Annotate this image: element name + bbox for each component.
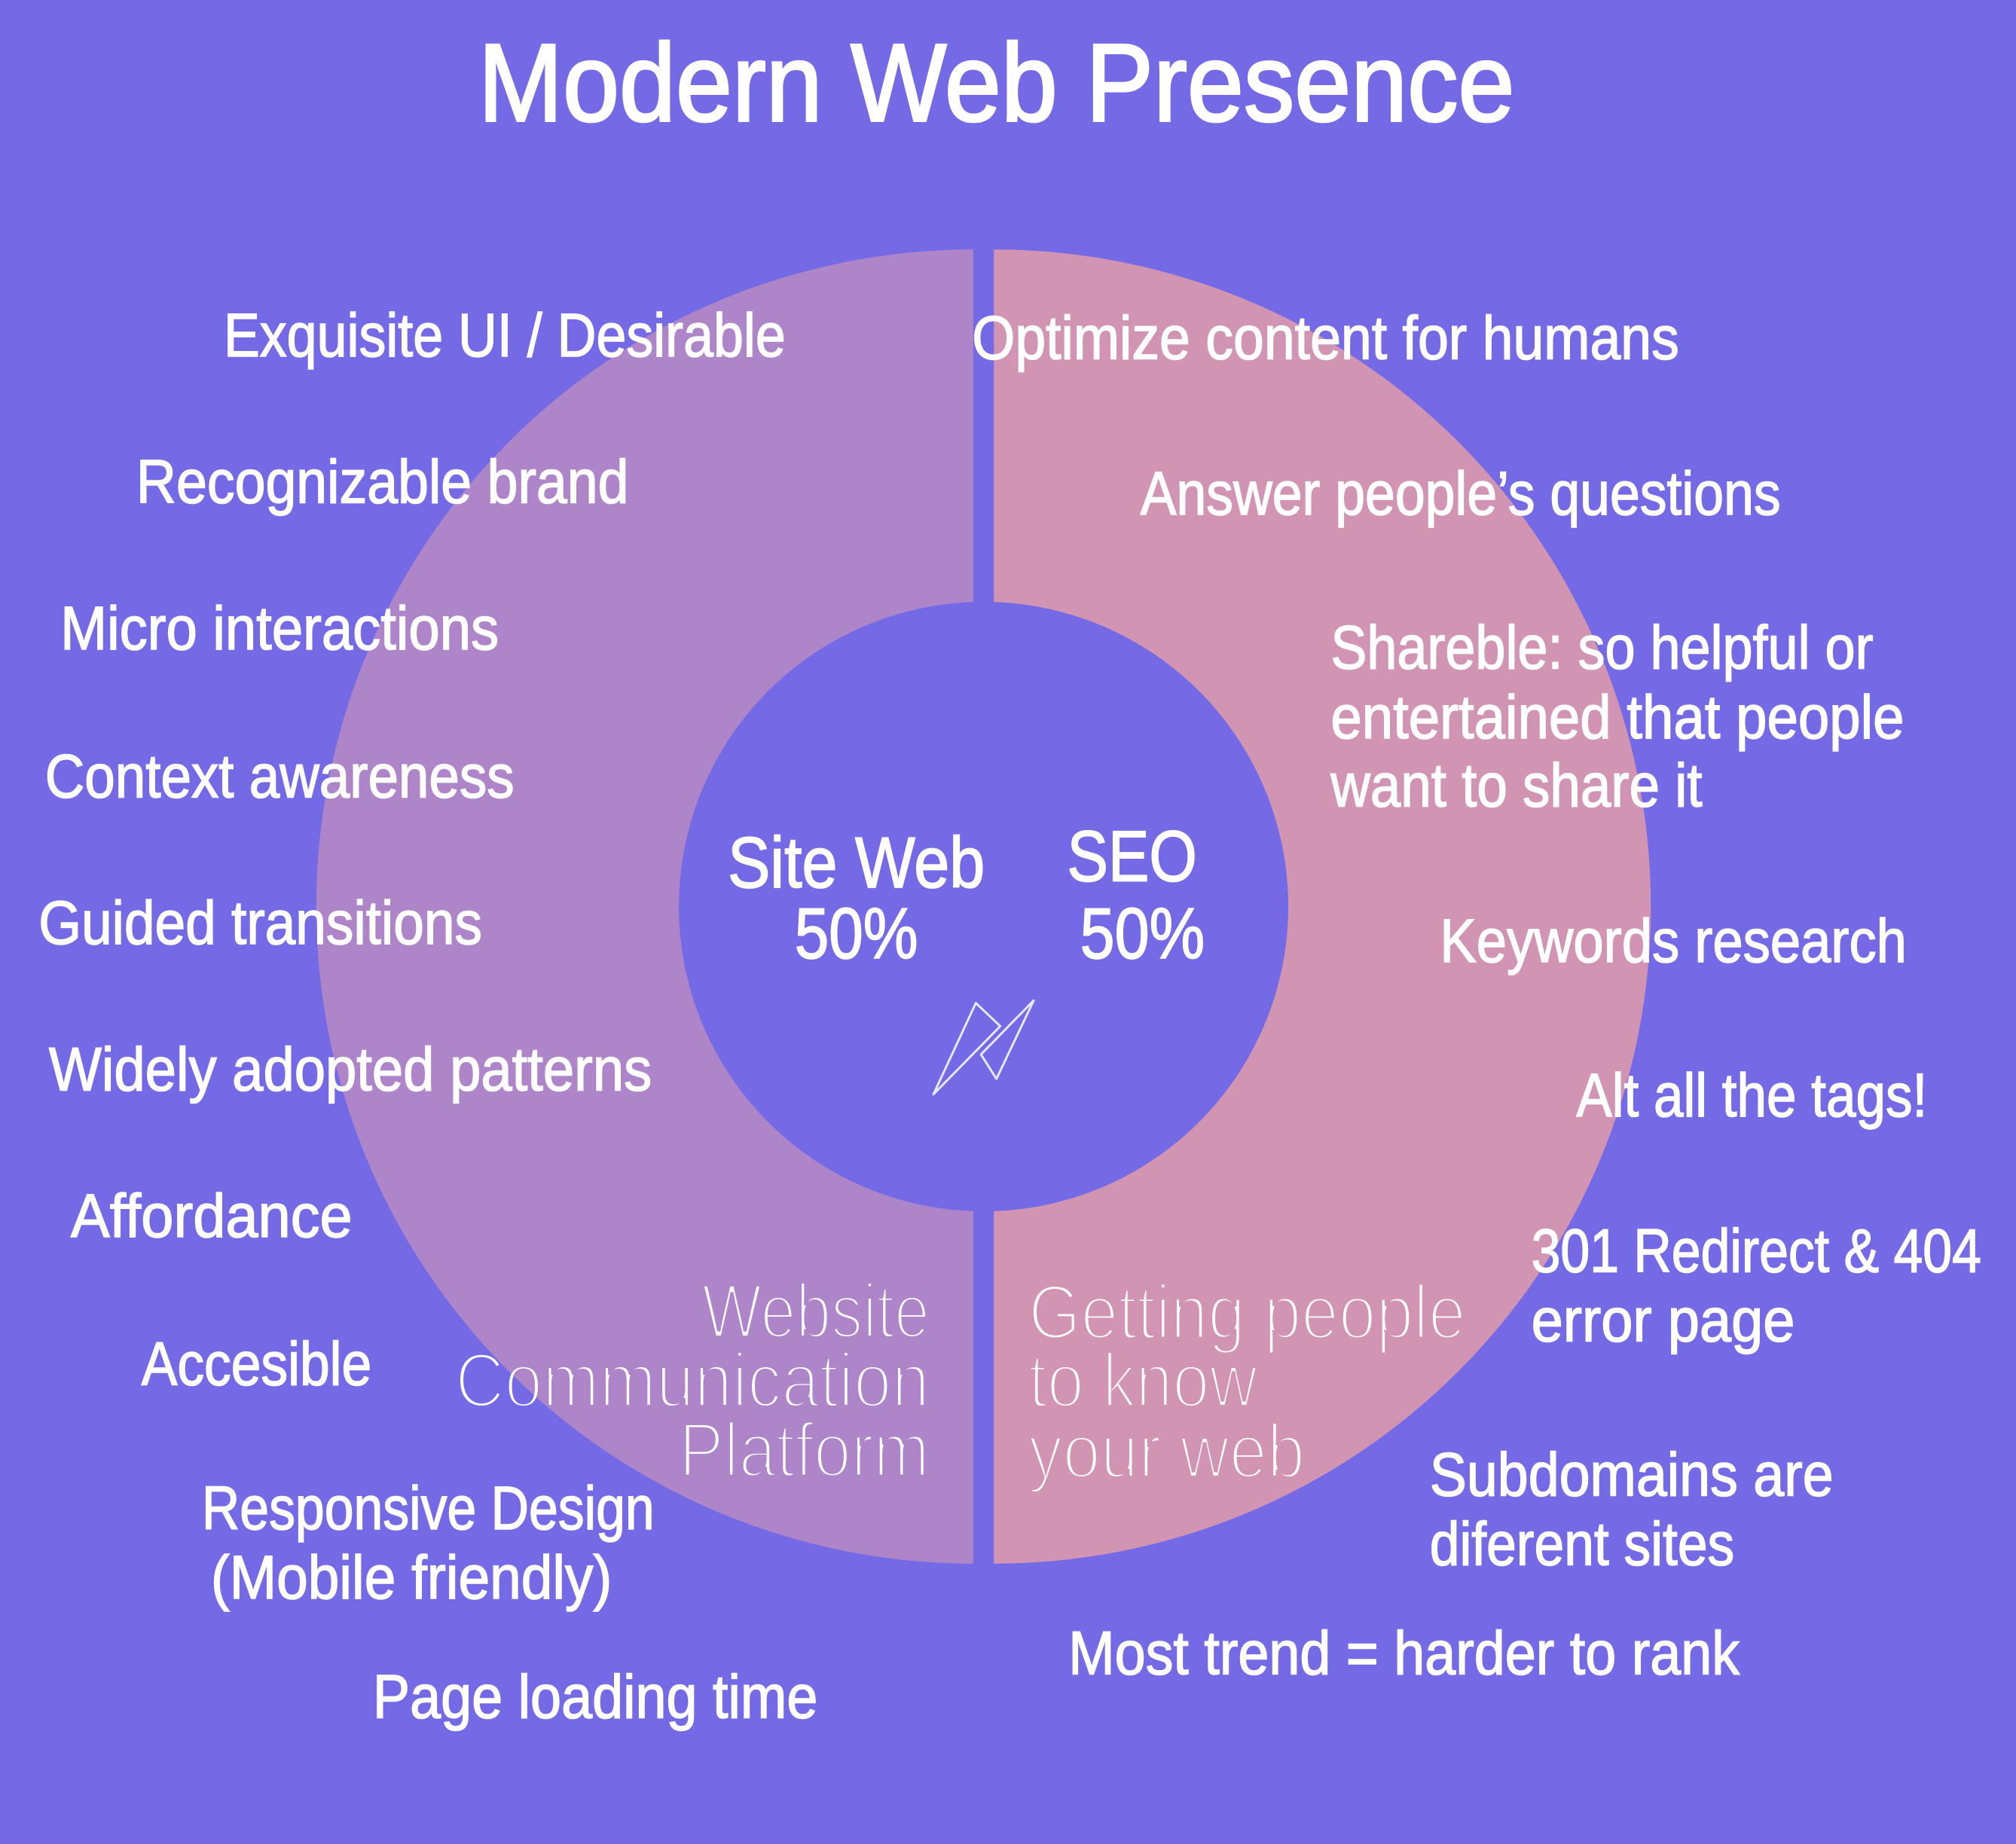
item: Subdomains are	[1430, 1440, 1834, 1509]
item: Shareble: so helpful or	[1330, 614, 1874, 682]
item	[1532, 1217, 1981, 1355]
caption: Website Communication Platform	[455, 1267, 930, 1493]
item: Most trend = harder to rank	[1068, 1620, 1740, 1688]
item: Exquisite UI / Desirable	[224, 301, 786, 370]
item: Micro interactions	[60, 594, 499, 663]
segment: Site Web 50%	[316, 249, 973, 1564]
item: Optimize content for humans	[972, 304, 1679, 372]
item: diferent sites	[1430, 1510, 1734, 1579]
caption: Getting people to know your web: Getting people	[1028, 1269, 1466, 1355]
item: Responsive Design	[202, 1474, 655, 1543]
item: Widely adopted patterns	[49, 1036, 652, 1104]
title: Modern Web Presence	[478, 21, 1514, 145]
right list: SEO items	[972, 304, 1981, 1688]
item	[202, 1474, 655, 1612]
caption: Getting people to know your web: your web	[1028, 1407, 1305, 1494]
caption: Website Communication Platform: Communication	[455, 1337, 930, 1424]
left list: website items	[38, 301, 817, 1732]
label: SEO 50%: SEO	[1068, 816, 1197, 896]
icon: logo	[933, 1000, 1034, 1094]
item: (Mobile friendly)	[211, 1543, 612, 1612]
label: SEO 50%	[1068, 816, 1205, 974]
donut hole	[679, 602, 1288, 1211]
item: want to share it	[1330, 751, 1703, 820]
item: Guided transitions	[38, 889, 482, 957]
label: Site Web 50%	[728, 823, 985, 974]
caption: Website Communication Platform: Platform	[679, 1406, 930, 1493]
item: error page	[1532, 1287, 1795, 1355]
donut chart	[316, 249, 1651, 1564]
caption: Getting people to know your web	[1028, 1269, 1466, 1494]
label: SEO 50%: 50%	[1080, 893, 1205, 974]
item: Page loading time	[373, 1663, 817, 1732]
item: Recognizable brand	[136, 447, 629, 516]
item	[1430, 1440, 1834, 1579]
item: Affordance	[71, 1182, 353, 1250]
item: Answer people’s questions	[1141, 459, 1781, 528]
item: Accesible	[142, 1330, 371, 1399]
label: Site Web 50%: 50%	[795, 893, 918, 974]
item	[1330, 614, 1905, 820]
item: Context awareness	[45, 742, 515, 811]
segment: SEO 50%	[994, 249, 1651, 1564]
label: Site Web 50%: Site Web	[728, 823, 985, 903]
item: Keywords research	[1440, 907, 1907, 975]
caption: Getting people to know your web: to know	[1028, 1337, 1258, 1424]
item: Alt all the tags!	[1576, 1061, 1927, 1130]
caption: Website Communication Platform: Website	[702, 1267, 930, 1354]
item: entertained that people	[1330, 683, 1905, 752]
